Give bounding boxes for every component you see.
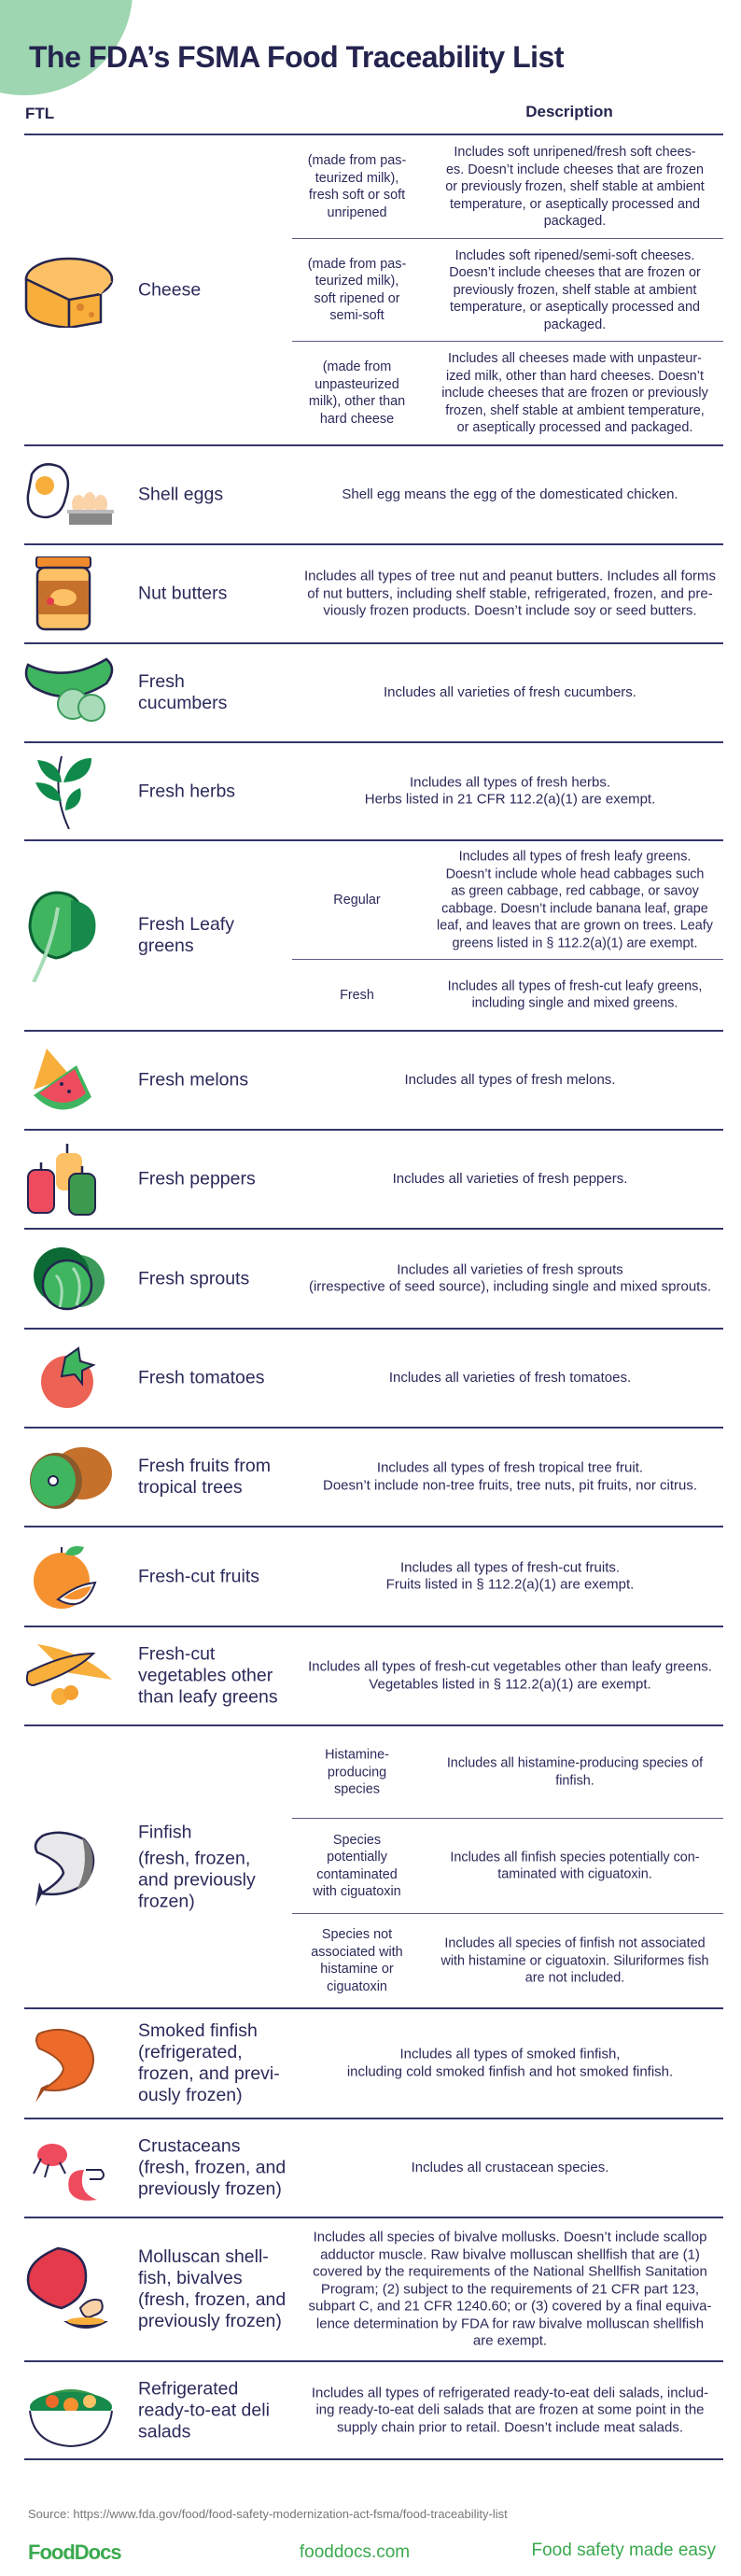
title: The FDA’s FSMA Food Traceability List <box>29 40 564 74</box>
cheese sub-rows: unpasteurized <box>315 377 399 392</box>
cheese sub-rows: Doesn’t include cheeses that are frozen or <box>449 265 701 280</box>
description: Includes all types of refrigerated ready-to-eat deli salads, includ- <box>312 2385 708 2400</box>
cheese sub-rows: Includes soft unripened/fresh soft chees- <box>454 145 696 160</box>
description: Includes all types of fresh melons. <box>405 1072 615 1088</box>
name: cucumbers <box>138 693 227 713</box>
row: crustaceans <box>24 2119 723 2218</box>
icon: fish <box>34 1832 95 1907</box>
name: Fresh tomatoes <box>138 1367 264 1387</box>
row: shell eggs <box>24 446 723 545</box>
finfish sub-rows: taminated with ciguatoxin. <box>497 1867 652 1882</box>
icon: salad bowl <box>29 2389 113 2447</box>
name: (fresh, frozen, and <box>138 2157 286 2177</box>
name: Fresh <box>138 671 185 692</box>
source text: Source: https://www.fda.gov/food/food-safety-modernization-act-fsma/food-traceability-list <box>28 2507 508 2521</box>
name: and previously <box>138 1869 256 1890</box>
row: smoked finfish <box>24 2009 723 2119</box>
name: salads <box>138 2421 190 2442</box>
decorative green circle <box>0 0 133 95</box>
name <box>138 1822 256 1911</box>
row: herbs <box>24 743 723 841</box>
description: are exempt. <box>473 2332 547 2348</box>
name: cheese: Cheese <box>138 279 201 300</box>
description: of nut butters, including shelf stable, refrigerated, frozen, and pre- <box>307 585 713 601</box>
description <box>386 1559 634 1593</box>
description: subpart C, and 21 CFR 1240.60; or (3) covered by a final equiva- <box>309 2298 711 2314</box>
description: including cold smoked finfish and hot smoked finfish. <box>347 2063 673 2079</box>
description: Includes all types of fresh tropical tree fruit. <box>377 1460 643 1475</box>
name: Fresh peppers <box>138 1169 256 1189</box>
cheese sub-rows: Includes soft ripened/semi-soft cheeses. <box>455 247 694 262</box>
finfish sub-rows: ciguatoxin <box>327 1979 387 1994</box>
name: ready-to-eat deli <box>138 2400 270 2420</box>
finfish sub-rows: finfish. <box>555 1773 594 1788</box>
icon: tomato <box>41 1346 96 1408</box>
leafy sub-rows: Doesn’t include whole head cabbages such <box>446 866 704 881</box>
icon: peppers <box>27 1144 96 1216</box>
name: vegetables other <box>138 1666 273 1686</box>
cheese sub-rows: frozen, shelf stable at ambient temperature, <box>445 402 705 417</box>
description: Shell egg means the egg of the domesticated chicken. <box>342 486 678 502</box>
finfish sub-rows: Includes all species of finfish not associated <box>444 1936 706 1950</box>
cheese sub-rows: soft ripened or <box>314 291 399 306</box>
icon: leafy greens <box>28 891 95 982</box>
cheese sub-rows: or previously frozen, shelf stable at ambient <box>445 179 705 194</box>
name: previously frozen) <box>138 2311 282 2331</box>
cheese sub-rows: es. Doesn’t include cheeses that are frozen <box>446 162 704 176</box>
footer slogan: Food safety made easy <box>532 2541 716 2560</box>
description: Includes all types of fresh-cut fruits. <box>400 1559 620 1575</box>
description <box>308 1658 712 1692</box>
row: tomatoes <box>24 1330 723 1429</box>
name: Fresh melons <box>138 1070 248 1091</box>
description <box>309 2229 711 2348</box>
name <box>138 1456 271 1498</box>
leafy sub-rows: Regular <box>333 893 381 908</box>
name: Shell eggs <box>138 484 223 504</box>
cheese sub-rows: hard cheese <box>320 411 394 426</box>
name: tropical trees <box>138 1477 243 1498</box>
icon: jar <box>35 556 91 631</box>
cheese sub-rows: teurized milk), <box>315 274 398 289</box>
finfish sub-rows: Species not <box>322 1927 392 1942</box>
description: Includes all types of fresh-cut vegetables other than leafy greens. <box>308 1658 712 1675</box>
name: ously frozen) <box>138 2085 243 2105</box>
description: Herbs listed in 21 CFR 112.2(a)(1) are exempt. <box>365 792 655 807</box>
name <box>138 2136 286 2200</box>
cheese sub-rows: Includes all cheeses made with unpasteur- <box>448 351 702 366</box>
description: covered by the requirements of the National Shellfish Sanitation <box>313 2263 707 2279</box>
row: leafy greens <box>24 841 723 1032</box>
finfish sub-rows: potentially <box>327 1850 387 1865</box>
finfish sub-rows: associated with <box>311 1944 403 1959</box>
header: Description: Description <box>525 103 613 120</box>
icon: shells <box>26 2246 108 2329</box>
description: Includes all types of fresh herbs. <box>410 774 610 790</box>
description: supply chain prior to retail. Doesn’t include meat salads. <box>337 2419 683 2435</box>
icon: smoked fish <box>35 2028 94 2103</box>
description: lence determination by FDA for raw bivalve molluscan shellfish <box>316 2316 704 2331</box>
leafy sub-rows: Fresh <box>340 987 374 1002</box>
cheese sub-rows: semi-soft <box>329 308 384 323</box>
row: deli salads <box>24 2362 723 2460</box>
leafy sub-rows: as green cabbage, red cabbage, or savoy <box>451 883 699 898</box>
icon: melon <box>34 1049 91 1109</box>
finfish sub-rows: histamine or <box>320 1962 394 1977</box>
description: Program; (2) subject to the requirements of 21 CFR part 123, <box>321 2281 699 2297</box>
row: peppers <box>24 1131 723 1230</box>
row: cheese <box>24 135 723 446</box>
cheese sub-rows: milk), other than <box>309 394 405 409</box>
cheese sub-rows: teurized milk), <box>315 170 398 185</box>
name: Crustaceans <box>138 2136 240 2157</box>
name <box>138 2020 280 2105</box>
description: Vegetables listed in § 112.2(a)(1) are exempt. <box>369 1676 651 1692</box>
leafy sub-rows: Includes all types of fresh leafy greens. <box>459 850 691 865</box>
name <box>138 914 234 956</box>
name: fish, bivalves <box>138 2268 243 2288</box>
leafy sub-rows: leaf, and leaves that are grown on trees. Leafy <box>437 919 713 934</box>
name: frozen, and previ- <box>138 2063 280 2084</box>
description: ing ready-to-eat deli salads that are frozen at some point in the <box>315 2401 705 2417</box>
cheese sub-rows: (made from <box>323 359 391 374</box>
name: (refrigerated, <box>138 2042 243 2062</box>
finfish sub-rows: with histamine or ciguatoxin. Siluriformes fish <box>440 1953 709 1968</box>
name: Refrigerated <box>138 2378 238 2399</box>
finfish sub-rows <box>292 1747 723 1994</box>
description: Includes all varieties of fresh sprouts <box>397 1261 623 1277</box>
description <box>365 774 655 807</box>
cheese sub-rows: previously frozen, shelf stable at ambient <box>454 282 696 297</box>
icon: cucumber <box>24 657 114 722</box>
footer website: fooddocs.com <box>300 2542 410 2562</box>
row: tropical fruits <box>24 1429 723 1527</box>
icon: eggs <box>26 463 114 525</box>
row: melons <box>24 1032 723 1131</box>
description: (irrespective of seed source), including single and mixed sprouts. <box>309 1279 711 1294</box>
row: fresh-cut fruits <box>24 1527 723 1627</box>
description: Includes all types of tree nut and peanut butters. Includes all forms <box>304 568 716 584</box>
cheese sub-rows: fresh soft or soft <box>309 188 405 203</box>
name: than leafy greens <box>138 1686 278 1707</box>
icon: sprouts <box>34 1247 105 1311</box>
cheese sub-rows: packaged. <box>544 317 606 331</box>
description: Includes all types of smoked finfish, <box>400 2047 620 2062</box>
icon: cheese <box>24 258 114 328</box>
finfish sub-rows: species <box>334 1781 380 1796</box>
cheese sub-rows: temperature, or aseptically processed and <box>450 300 700 315</box>
finfish sub-rows: Species <box>333 1832 381 1847</box>
name: (fresh, frozen, <box>138 1848 250 1868</box>
description <box>312 2385 708 2435</box>
name <box>138 2246 286 2331</box>
cheese sub-rows: temperature, or aseptically processed and <box>450 196 700 211</box>
leafy sub-rows: including single and mixed greens. <box>472 995 678 1010</box>
name <box>138 2378 270 2442</box>
name: Molluscan shell- <box>138 2246 269 2267</box>
description: viously frozen products. Doesn’t include soy or seed butters. <box>323 602 697 618</box>
name: Fresh Leafy <box>138 914 234 935</box>
name <box>138 1643 278 1707</box>
cheese sub-rows: unripened <box>327 205 386 220</box>
name: frozen) <box>138 1891 195 1911</box>
description <box>323 1460 697 1493</box>
finfish sub-rows: are not included. <box>525 1970 624 1985</box>
name <box>138 671 227 713</box>
name: (fresh, frozen, and <box>138 2289 286 2310</box>
finfish sub-rows: Includes all histamine-producing species of <box>447 1755 703 1770</box>
icon: crab and shrimp <box>33 2144 105 2201</box>
icon: kiwi <box>30 1447 112 1509</box>
finfish sub-rows: Includes all finfish species potentially con- <box>450 1850 700 1865</box>
description <box>309 1261 711 1294</box>
finfish sub-rows: contaminated <box>316 1867 398 1882</box>
cheese sub-rows: include cheeses that are frozen or previously <box>441 386 708 401</box>
cheese sub-rows: (made from pas- <box>308 153 406 168</box>
cheese sub-rows: (made from pas- <box>308 256 406 271</box>
row: molluscan shellfish <box>24 2218 723 2362</box>
description: Includes all species of bivalve mollusks. Doesn’t include scallop <box>314 2229 706 2245</box>
name: previously frozen) <box>138 2179 282 2200</box>
description <box>304 568 716 618</box>
icon: orange <box>34 1546 97 1609</box>
description: adductor muscle. Raw bivalve molluscan shellfish that are (1) <box>320 2246 700 2262</box>
row: fresh-cut vegetables <box>24 1627 723 1726</box>
description: Includes all varieties of fresh cucumbers. <box>384 684 636 700</box>
name: Fresh sprouts <box>138 1268 249 1288</box>
finfish sub-rows: producing <box>328 1765 386 1780</box>
name: Fresh fruits from <box>138 1456 271 1476</box>
row: nut butters <box>24 545 723 644</box>
description: Includes all varieties of fresh tomatoes. <box>389 1370 631 1386</box>
name: Fresh herbs <box>138 781 235 801</box>
name: Fresh-cut fruits <box>138 1566 259 1586</box>
description: Fruits listed in § 112.2(a)(1) are exempt. <box>386 1576 634 1593</box>
leafy sub-rows: Includes all types of fresh-cut leafy greens, <box>448 978 702 993</box>
icon: carrots <box>26 1644 112 1705</box>
footer logo: FoodDocs: FoodDocs <box>28 2541 121 2564</box>
cheese sub-rows: ized milk, other than hard cheeses. Doesn’t <box>446 368 704 383</box>
finfish sub-rows: Histamine- <box>325 1747 389 1762</box>
description <box>347 2047 673 2079</box>
row: sprouts <box>24 1230 723 1330</box>
description: Includes all varieties of fresh peppers. <box>393 1171 627 1187</box>
name: Smoked finfish <box>138 2020 258 2041</box>
cheese sub-rows: packaged. <box>544 214 606 229</box>
cheese sub-rows: or aseptically processed and packaged. <box>457 420 692 435</box>
description: Includes all crustacean species. <box>412 2160 608 2175</box>
leafy sub-rows: cabbage. Doesn’t include banana leaf, grape <box>441 901 708 916</box>
leafy sub-rows: greens listed in § 112.2(a)(1) are exempt. <box>453 936 697 950</box>
header: FTL: FTL <box>25 105 54 122</box>
leafy sub-rows <box>292 850 723 1010</box>
name: Nut butters <box>138 583 227 603</box>
icon: herb <box>35 756 91 829</box>
finfish sub-rows: with ciguatoxin <box>313 1884 401 1899</box>
name: Fresh-cut <box>138 1643 215 1664</box>
cheese sub-rows <box>292 145 723 435</box>
description: Doesn’t include non-tree fruits, tree nuts, pit fruits, nor citrus. <box>323 1477 697 1493</box>
name: greens <box>138 936 194 956</box>
row: cucumbers <box>24 644 723 743</box>
name: Finfish <box>138 1822 191 1842</box>
row: finfish <box>24 1726 723 2009</box>
